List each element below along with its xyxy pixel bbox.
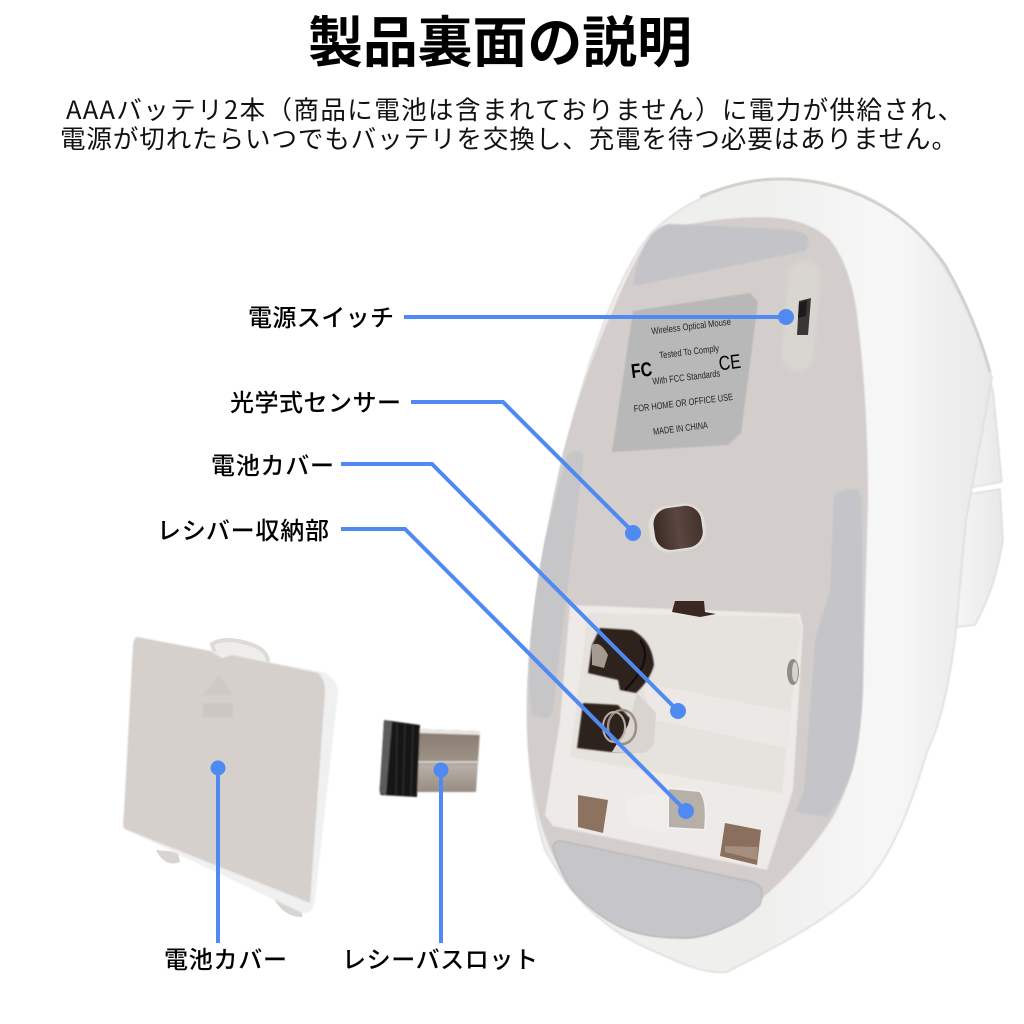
base plate [527, 217, 868, 938]
label: optical sensor: 光学式センサー [230, 390, 401, 417]
label sticker: CE [718, 351, 742, 375]
mouse white shell [528, 179, 992, 972]
label: receiver storage: レシバー収納部 [157, 518, 329, 545]
bottom skate pad [553, 841, 762, 938]
battery spring wiring [588, 628, 654, 693]
callout: optical sensor [411, 402, 641, 541]
battery latch [672, 601, 716, 617]
label sticker: MADE IN CHINA [653, 420, 709, 438]
cover face [123, 637, 325, 903]
cover ring tab [212, 640, 268, 666]
battery compartment [545, 601, 803, 870]
power switch [780, 260, 822, 372]
square holes [578, 788, 761, 865]
battery cover photo [123, 637, 338, 917]
label sticker: FOR HOME OR OFFICE USE [633, 392, 734, 415]
title: 製品裏面の説明 [308, 12, 692, 74]
callout: power switch [404, 309, 794, 325]
side buttons [947, 377, 1003, 628]
label: power switch: 電源スイッチ [248, 305, 394, 332]
optical sensor [646, 501, 708, 555]
top skate pad [633, 224, 809, 285]
label sticker: FC [630, 359, 653, 383]
callout: receiver storage [341, 529, 694, 819]
intro text: AAAバッテリ2本（商品に電池は含まれておりません）に電力が供給され、 [66, 90, 963, 127]
right skate pad [795, 489, 863, 817]
label: receiver slot: レシーバスロット [342, 947, 538, 974]
left skate pad [529, 451, 583, 718]
intro text: 電源が切れたらいつでもバッテリを交換し、充電を待つ必要はありません。 [60, 119, 957, 156]
usb receiver photo [380, 720, 480, 797]
label sticker: Wireless Optical Mouse [651, 317, 732, 337]
callout: removed battery cover [210, 760, 226, 943]
mouse underside photo [527, 179, 1003, 972]
receiver black grip [380, 720, 420, 797]
cover white edge [123, 637, 338, 913]
callout: battery cover [341, 464, 686, 719]
label: battery cover: 電池カバー [211, 453, 334, 480]
cover arrow mark [203, 675, 234, 717]
label sticker: Tested To Comply [659, 343, 720, 362]
shell seam [700, 179, 990, 372]
intro text [60, 90, 963, 156]
cover feet [156, 850, 302, 917]
label sticker [612, 293, 758, 452]
label sticker: With FCC Standards [652, 368, 721, 388]
callout: receiver slot [434, 762, 448, 943]
label: bottom battery cover: 電池カバー [164, 947, 287, 974]
receiver metal plug [416, 729, 480, 792]
